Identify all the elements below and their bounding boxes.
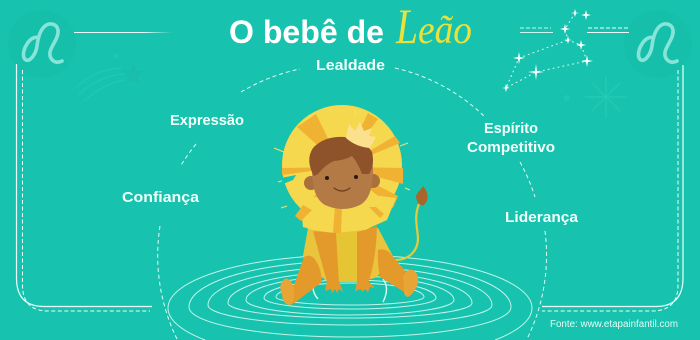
tail <box>395 204 419 260</box>
mouth <box>334 188 350 191</box>
face <box>312 143 373 209</box>
left leg <box>284 256 322 304</box>
label: Espírito Competitivo: Espírito <box>484 120 538 137</box>
label: Confiança: Confiança <box>122 189 200 206</box>
right badge background <box>624 10 692 78</box>
eyes <box>325 175 358 180</box>
mane <box>274 105 410 225</box>
right ear <box>366 174 380 188</box>
icon: faint shooting star <box>76 54 144 101</box>
label: Espírito Competitivo: Competitivo <box>467 139 555 156</box>
icon: leo sign right <box>638 24 677 62</box>
title: Leão, lowercase: eão <box>418 7 472 52</box>
body <box>303 228 395 282</box>
icon: leo sign left <box>23 24 62 62</box>
title <box>229 0 472 54</box>
dashed circle arcs <box>158 68 547 339</box>
frame: right corner <box>542 65 683 311</box>
ruff collar <box>295 194 396 233</box>
right hand <box>355 281 375 292</box>
left foot <box>280 279 294 305</box>
left ear <box>304 176 318 190</box>
frame: top left lines <box>71 28 176 33</box>
title: O bebê de: O bebê de <box>229 14 384 50</box>
label: Espírito Competitivo <box>467 120 555 156</box>
label: Expressão: Expressão <box>170 112 244 129</box>
left arm <box>313 231 339 283</box>
tail tuft <box>416 186 428 205</box>
right foot <box>403 270 418 297</box>
frame: top right lines <box>520 28 630 33</box>
left hand <box>325 281 343 293</box>
body stripe <box>336 232 358 282</box>
right arm <box>357 226 377 283</box>
crown <box>346 122 376 148</box>
icon: faint sparkle <box>564 76 627 118</box>
right leg <box>378 249 409 295</box>
source credit: Fonte: www.etapainfantil.com <box>550 319 678 330</box>
left badge background <box>8 10 76 78</box>
label: Lealdade: Lealdade <box>316 57 385 74</box>
constellation <box>502 9 593 92</box>
label: Liderança: Liderança <box>505 209 579 226</box>
baby lion <box>274 105 428 305</box>
frame: left corner <box>16 64 152 311</box>
concentric ripples <box>168 255 532 340</box>
hair <box>309 137 373 176</box>
